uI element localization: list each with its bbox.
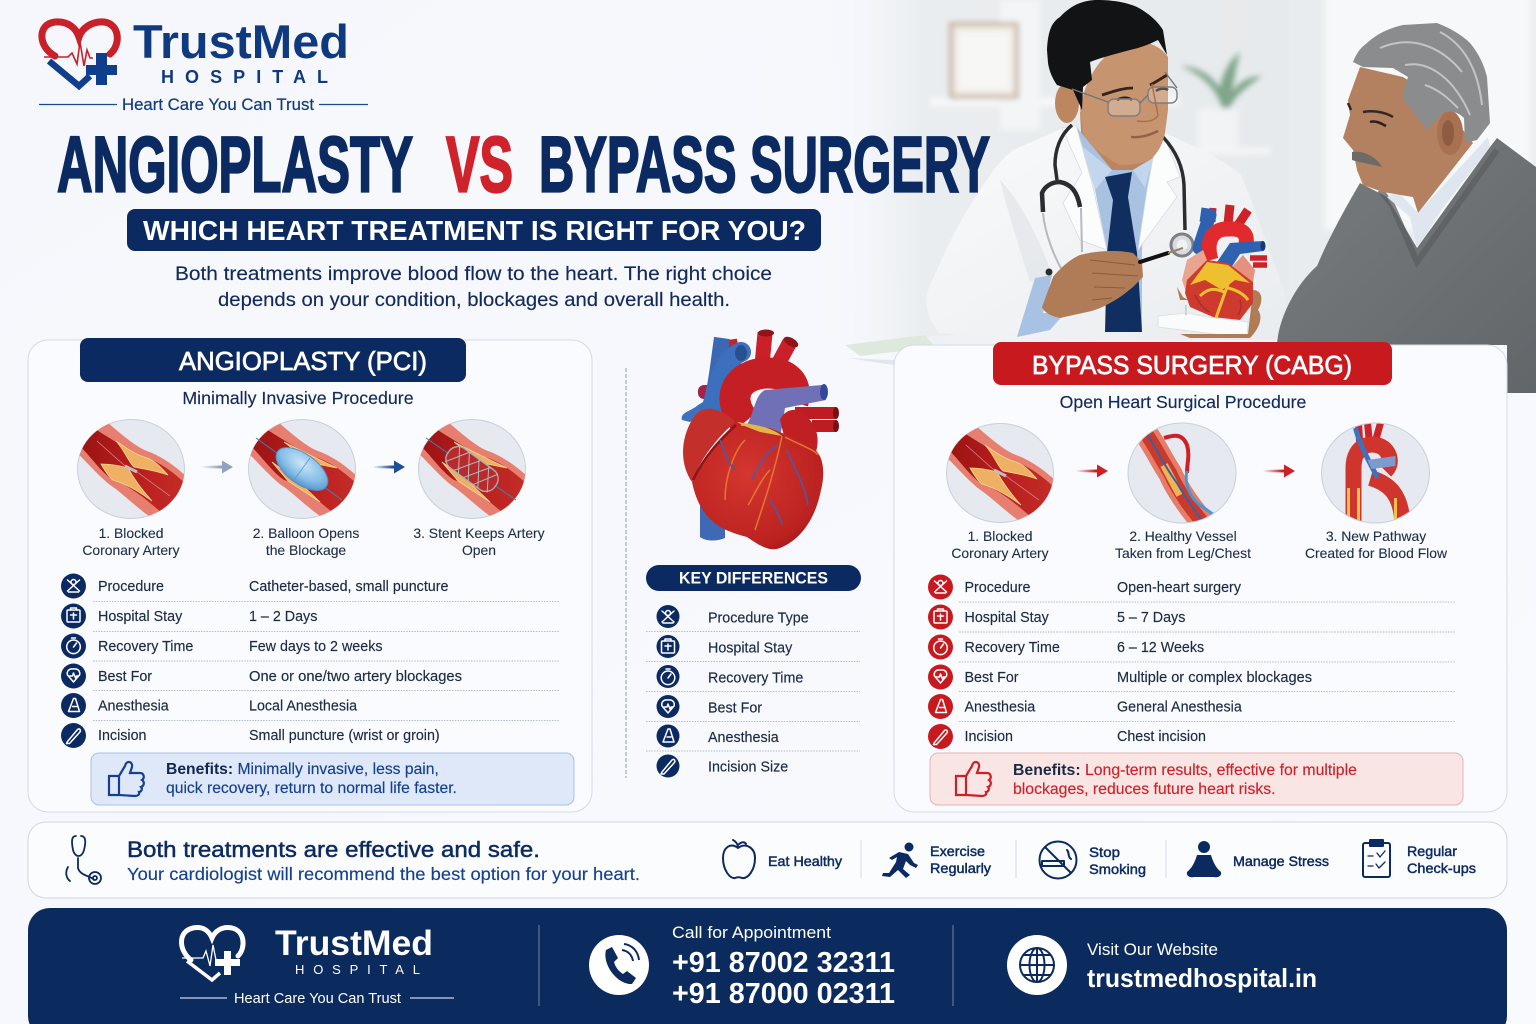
title [57,120,990,208]
row: hospital stay [928,604,1185,630]
panel: bypass surgery [894,342,1507,812]
row: recovery time: Recovery Time [964,640,1060,656]
row: best for [61,664,462,688]
step captions: Created for Blood Flow [1305,545,1448,561]
row: best for: Best For [98,669,152,685]
key item: hospital stay: Hospital Stay [708,640,793,656]
row: incision: Incision [964,729,1013,745]
centre divider [625,368,627,778]
footer: website: Visit Our Website [1087,941,1218,959]
row: best for: Best For [964,670,1019,686]
step captions: 1. Blocked [99,525,163,541]
panel subheading: Minimally Invasive Procedure [182,388,414,408]
step captions: 1. Blocked [968,528,1032,544]
step captions [82,525,545,558]
tip: exercise regularly: Regularly [930,860,991,876]
photo: doctor explaining heart model to patient [820,0,1536,393]
photo: heart model [1158,205,1267,338]
reassurance text: Your cardiologist will recommend the best option for your heart. [127,864,640,884]
intro text [175,263,772,311]
logo tagline: Heart Care You Can Trust [122,96,314,114]
step 1: blocked artery [940,418,1060,531]
doctor tie [1105,172,1142,332]
doctor arm and hand [1017,275,1065,337]
row: anesthesia: Anesthesia [98,698,169,714]
row: recovery time: 6 – 12 Weeks [1117,640,1204,656]
row: anesthesia: Local Anesthesia [249,698,357,714]
row: anesthesia: Anesthesia [964,700,1035,716]
tip: regular check-ups [1363,840,1476,877]
photo: patient [1277,23,1536,393]
tip: stop smoking: Smoking [1089,861,1146,877]
stethoscope [1042,125,1193,276]
row: hospital stay: Hospital Stay [964,610,1050,626]
key item: anesthesia: Anesthesia [708,730,779,746]
icon: heart logo [42,22,117,86]
intro text: depends on your condition, blockages and overall health. [218,289,730,311]
icon: phone [589,935,649,995]
step captions: 3. New Pathway [1326,528,1426,544]
row: best for: One or one/two artery blockages [249,669,462,685]
tip: manage stress [1187,841,1329,877]
icon: footer heart [181,928,243,980]
footer: call for appointment [589,924,895,1010]
illustration: human heart [682,330,839,549]
row: hospital stay: 1 – 2 Days [249,609,317,625]
row: recovery time: Few days to 2 weeks [249,639,382,655]
doctor face [1080,42,1168,165]
icon: thumbs up [109,762,144,796]
panel heading: bypass: BYPASS SURGERY (CABG) [1032,352,1352,380]
doctor shirt [1075,125,1153,332]
row: hospital stay: Hospital Stay [98,609,183,625]
title: VS [446,120,513,208]
arrow [373,460,405,474]
row: hospital stay [61,604,317,628]
key item: incision size: Incision Size [708,760,788,776]
key item: recovery time [656,665,803,688]
footer: website: trustmedhospital.in [1087,963,1317,993]
tip: stop smoking: Stop [1089,844,1120,860]
step captions: Coronary Artery [951,545,1049,561]
benefits text: quick recovery, return to normal life faster. [166,780,457,797]
row: procedure [61,574,449,598]
reassurance text [127,837,640,884]
panel subheading: Open Heart Surgical Procedure [1060,392,1307,412]
icon: thumbs up [956,762,991,796]
tip: regular check-ups: Regular [1407,843,1457,859]
step 3: stent [412,414,532,527]
step 3: new pathway [1322,423,1430,528]
step 2: balloon [242,414,362,527]
tip: eat healthy [723,840,842,878]
row: incision: Incision [98,728,147,744]
comparison table: angioplasty [61,574,560,748]
arrow [1076,464,1108,478]
row: incision [61,723,440,748]
benefits text [166,761,457,797]
intro text: Both treatments improve blood flow to the heart. The right choice [175,263,772,285]
tip: exercise regularly [882,842,991,878]
arrow [1263,464,1295,478]
benefits text: blockages, reduces future heart risks. [1013,781,1276,798]
patient sweater [1277,138,1536,393]
benefits callout: bypass [930,753,1463,805]
icon: stethoscope [66,836,101,884]
row: procedure: Procedure [964,580,1031,596]
key item: hospital stay [656,635,793,658]
reassurance and lifestyle strip [28,822,1507,898]
icon: globe [1007,935,1067,995]
logo subtitle: HOSPITAL [161,67,328,87]
key item: incision size [656,754,788,778]
row: incision: Chest incision [1117,729,1206,745]
tip: regular check-ups: Check-ups [1407,860,1476,876]
row: procedure: Procedure [98,579,164,595]
photo: doctor [926,0,1286,340]
step captions: 3. Stent Keeps Artery [413,525,545,541]
row: recovery time [928,634,1204,660]
tip: stop smoking [1040,842,1146,878]
title: ANGIOPLASTY [57,120,413,208]
footer: website [1007,935,1317,995]
key item: best for [656,695,762,718]
step captions: Open [462,542,496,558]
patient features [1348,103,1393,117]
reassurance text: Both treatments are effective and safe. [127,837,540,862]
patient shirt collar [1387,137,1490,248]
row: recovery time [61,634,382,658]
step 1: blocked artery [71,414,191,527]
doctor lapels [1062,125,1107,250]
row: incision [928,724,1206,749]
panel: angioplasty [28,338,592,812]
step captions [951,528,1448,561]
key item: recovery time: Recovery Time [708,670,803,686]
logo wordmark: TrustMed [133,15,349,68]
key differences heading [646,565,861,591]
step 2: healthy vessel [1128,423,1236,533]
key item: procedure type [656,605,809,628]
arrow [201,460,233,474]
benefits text: Benefits: Minimally invasive, less pain, [166,761,439,778]
footer tagline: Heart Care You Can Trust [234,991,401,1007]
key differences column [646,565,861,778]
key item: procedure type: Procedure Type [708,610,809,626]
row: recovery time: Recovery Time [98,639,193,655]
footer wordmark: TrustMed [275,924,433,963]
row: best for: Multiple or complex blockages [1117,670,1312,686]
step captions: 2. Healthy Vessel [1129,528,1237,544]
footer: call for appointment: Call for Appointment [672,924,831,942]
benefits text: Benefits: Long-term results, effective for multiple [1013,762,1357,779]
doctor neck [1080,112,1153,178]
row: incision: Small puncture (wrist or groin) [249,728,440,744]
row: anesthesia: General Anesthesia [1117,700,1242,716]
comparison table: bypass [928,574,1455,749]
tip: manage stress: Manage Stress [1233,853,1329,869]
row: best for [928,664,1312,690]
panel heading: angioplasty: ANGIOPLASTY (PCI) [179,348,427,376]
photo: clinic background wall [820,0,1536,366]
step captions: Coronary Artery [82,542,180,558]
row: procedure [928,574,1242,600]
row: anesthesia [928,694,1242,719]
title: BYPASS SURGERY [539,120,990,208]
patient neck and face [1343,67,1473,213]
benefits text [1013,762,1357,798]
panel heading: bypass [993,342,1392,385]
step captions: Taken from Leg/Chest [1115,545,1251,561]
logo: TrustMed Hospital [39,15,368,114]
footer: call for appointment: +91 87002 32311 [672,947,895,979]
footer: call for appointment: +91 87000 02311 [672,978,895,1010]
doctor glasses and features [1072,72,1177,137]
tip: eat healthy: Eat Healthy [768,853,842,869]
benefits callout: angioplasty [91,753,574,805]
row: anesthesia [61,693,357,718]
footer logo [180,924,454,1007]
footer bar [28,908,1507,1024]
step captions: the Blockage [266,542,346,558]
key differences heading: KEY DIFFERENCES [679,570,828,588]
doctor coat [926,128,1286,340]
panel heading: angioplasty [80,338,466,382]
doctor hair [1047,0,1167,110]
row: procedure: Catheter-based, small puncture [249,579,449,595]
footer logo subtitle: HOSPITAL [295,962,420,977]
key item: anesthesia [656,724,779,748]
row: hospital stay: 5 – 7 Days [1117,610,1185,626]
row: procedure: Open-heart surgery [1117,580,1242,596]
step captions: 2. Balloon Opens [253,525,359,541]
patient hair [1353,23,1490,143]
subtitle banner: WHICH HEART TREATMENT IS RIGHT FOR YOU? [143,215,806,246]
tip: exercise regularly: Exercise [930,843,985,859]
key item: best for: Best For [708,700,762,716]
